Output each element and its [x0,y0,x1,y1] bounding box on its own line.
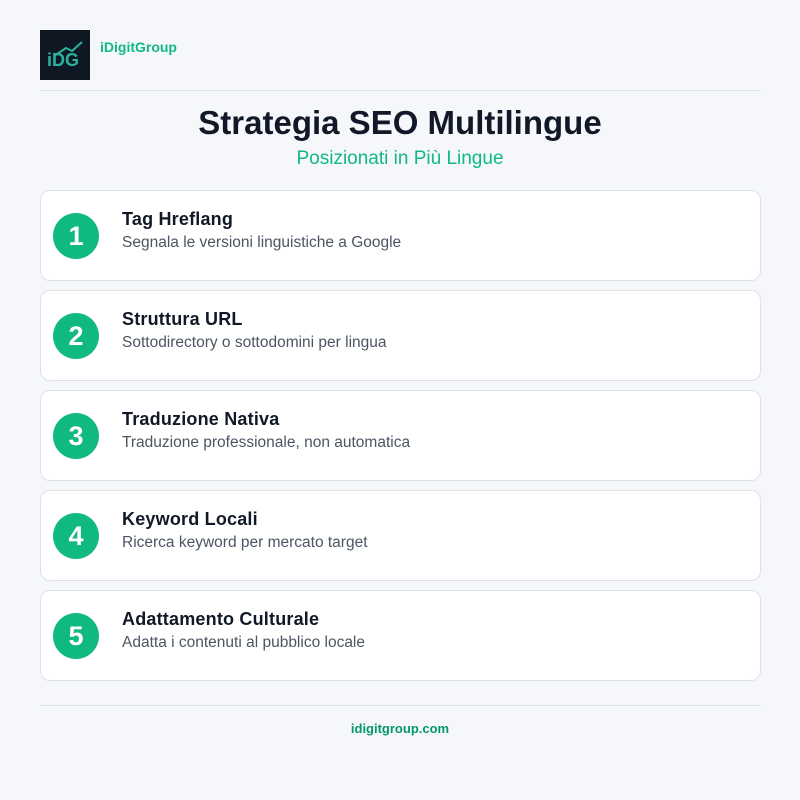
card 5 [40,590,761,681]
card 5: Adattamento Culturale [122,609,319,629]
logo: iDG [47,50,79,70]
card 2 [40,290,761,381]
card 2: Sottodirectory o sottodomini per lingua [122,334,387,351]
brand name: iDigitGroup [100,39,177,55]
card 4: 4 [68,521,84,551]
logo [40,30,90,80]
card 2: Struttura URL [122,309,243,329]
subtitle: Posizionati in Più Lingue [296,148,504,169]
card 4: Keyword Locali [122,509,258,529]
card 4: Ricerca keyword per mercato target [122,534,368,551]
card 1 [40,190,761,281]
card 5: 5 [68,621,84,651]
card 3 [40,390,761,481]
card 2: 2 [68,321,84,351]
card 3: Traduzione Nativa [122,409,279,429]
card 3: 3 [68,421,84,451]
title: Strategia SEO Multilingue [198,104,602,141]
card 1: 1 [68,221,84,251]
card 1: Segnala le versioni linguistiche a Google [122,234,401,251]
card 1: Tag Hreflang [122,209,233,229]
footer: idigitgroup.com [351,721,449,736]
card 5: Adatta i contenuti al pubblico locale [122,634,365,651]
card 3: Traduzione professionale, non automatica [122,434,410,451]
card 4 [40,490,761,581]
